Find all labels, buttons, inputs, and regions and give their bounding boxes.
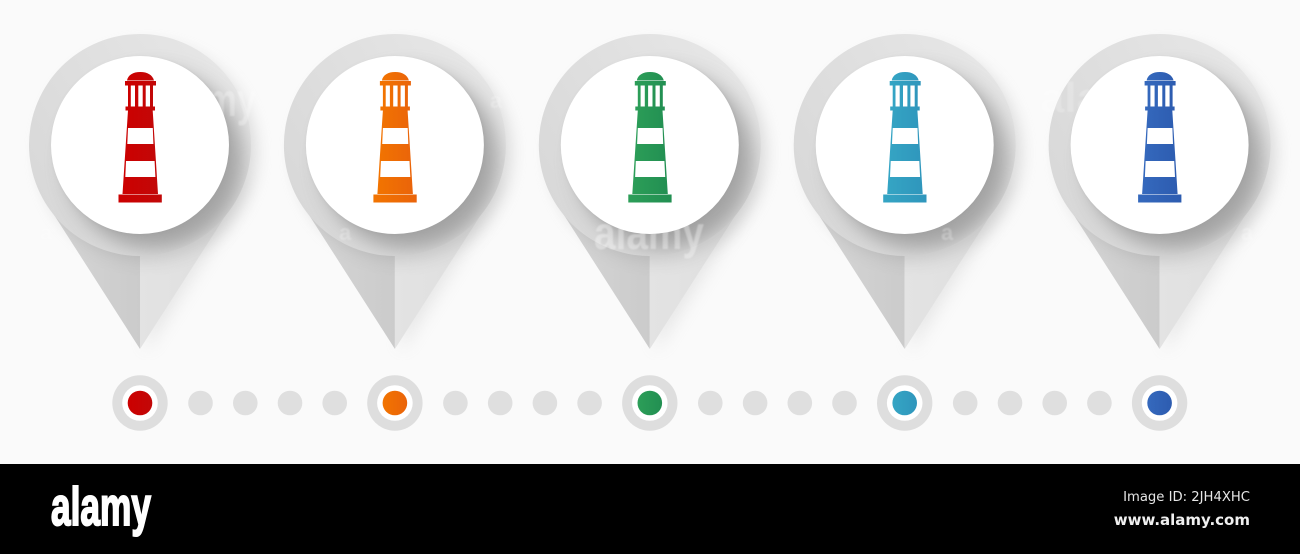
pin body [794, 34, 1021, 352]
watermarks: my [206, 74, 256, 126]
timeline marker: green [622, 375, 678, 431]
pin body [284, 34, 511, 352]
timeline marker: orange [367, 375, 423, 431]
watermarks: a [1241, 220, 1254, 245]
icon: red lighthouse [118, 72, 162, 202]
icon: blue lighthouse [1138, 72, 1181, 202]
footer logo: alamy: alamy [51, 477, 151, 537]
watermarks: a [490, 88, 503, 113]
watermarks [40, 74, 1254, 259]
grey dots: second group [443, 391, 602, 415]
watermarks: a [339, 220, 352, 245]
pin: orange lighthouse [284, 34, 511, 352]
grey dots: fourth group [953, 391, 1112, 415]
footer band [0, 464, 1300, 554]
grey dots: first group [188, 391, 347, 415]
footer text: website: www.alamy.com [1114, 511, 1250, 529]
watermarks: alamy [594, 207, 704, 259]
pin: teal lighthouse [794, 34, 1021, 352]
footer text: image id: Image ID: 2JH4XHC [1123, 490, 1250, 505]
pin: red lighthouse [29, 34, 256, 352]
icon: green lighthouse [628, 72, 672, 202]
pin body [539, 34, 766, 352]
watermarks: a [941, 220, 954, 245]
pin body [29, 34, 256, 352]
timeline marker: red [112, 375, 168, 431]
watermarks: alam [1040, 74, 1140, 121]
timeline: ringed coloured dots and grey dots [112, 375, 1187, 431]
pin: blue lighthouse [1049, 34, 1276, 352]
icon: orange lighthouse [373, 72, 417, 202]
pin: green lighthouse [539, 34, 766, 352]
icon: teal lighthouse [883, 72, 926, 202]
timeline marker: blue [1132, 375, 1187, 431]
timeline marker: teal [877, 375, 932, 431]
pin body [1049, 34, 1276, 352]
watermarks: a [40, 220, 53, 245]
grey dots: third group [698, 391, 857, 415]
